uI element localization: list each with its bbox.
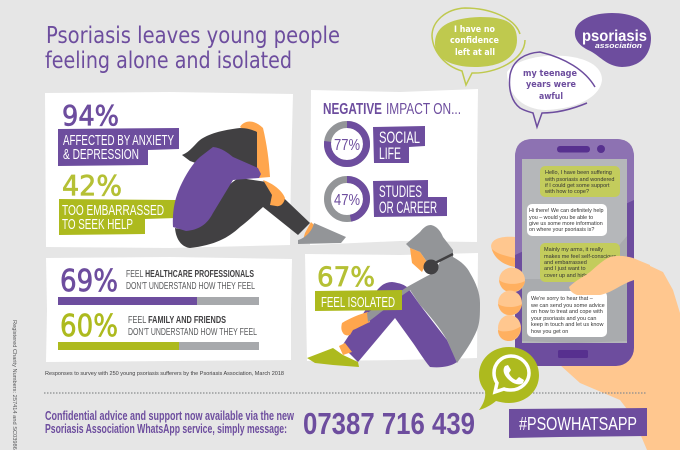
panel: feel isolated [305,253,478,361]
text: healthcare professionals: DON'T UNDERSTAND HOW THEY FEEL [126,281,255,292]
chat bubble 1: with psoriasis and wondered [544,177,614,183]
stat: 94%: 94% [62,99,119,132]
icon: whatsapp [479,347,539,410]
title: Psoriasis leaves young people [46,23,340,49]
bar: 60% [58,342,259,350]
label: affected by anxiety and depression: & DEPRESSION [63,146,139,163]
logo: psoriasis association [575,13,651,67]
footer message: Confidential advice and support now available via the new [45,408,295,423]
chat bubble 1: if I could get some support [545,183,610,189]
label: too embarrassed to seek help [59,199,176,235]
title [45,23,340,74]
donut: 47% studies or career [328,180,366,218]
divider [44,392,647,394]
phone number: 07387 716 439 [303,406,475,441]
speech bubble: teenage years: my teenage [523,69,577,79]
label: affected by anxiety and depression [58,128,179,166]
speech bubble: teenage years [507,52,602,127]
label: social life: SOCIAL [379,128,420,147]
chat bubble 3: makes me feel self-conscious [544,254,616,260]
hashtag [509,408,647,438]
chat bubble 4: We're sorry to hear that – [531,296,594,302]
phone body [515,139,634,366]
footer message: Psoriasis Association WhatsApp service, simply message: [45,421,287,436]
panel: healthcare and family understanding [46,257,292,362]
label: social life: LIFE [379,144,401,163]
logo: psoriasis association: psoriasis [582,28,647,45]
stat: 42%: 42% [62,169,122,202]
text: family and friends [128,315,257,338]
donut: 77% social life: 77% [334,137,360,154]
label: affected by anxiety and depression: AFFECTED BY ANXIETY [63,132,174,149]
label: studies or career: OR CAREER [379,198,437,217]
donut: 47% studies or career: 47% [334,192,360,209]
stat: 60%: 60% [60,309,118,344]
chat bubble 4: your psoriasis and you can [531,316,596,322]
bar: 69% [58,297,259,305]
chat bubble 2 [527,204,607,236]
label: feel isolated [315,290,402,311]
stat: 69%: 69% [60,264,118,299]
chat bubble 2: you – would you be able to [529,215,593,221]
label: social life [373,126,425,163]
heading [323,101,461,118]
chat bubble 4 [527,291,607,337]
speech bubble: no confidence: I have no [454,25,495,35]
heading: IMPACT ON... [386,101,461,118]
panel: anxiety and embarrassment [45,92,293,248]
chat bubble 3: cover up and hide [544,273,588,279]
speech bubble: no confidence: confidence [450,36,499,46]
hand: top finger [491,237,515,267]
text: family and friends: DON'T UNDERSTAND HOW THEY FEEL [128,327,257,338]
illustration: phone in hand [491,139,680,450]
charity registration: Registered Charity Numbers: 257414 and SC039866 [11,320,17,450]
heading: NEGATIVE [323,101,382,118]
logo: psoriasis association: association [595,41,642,50]
speech bubble: no confidence [432,8,525,85]
donut: 77% social life [328,124,366,164]
title: feeling alone and isolated [45,48,292,74]
chat bubble 1 [540,166,620,197]
hand: thumb over phone [569,256,650,300]
chat bubble 1: with how to cope? [544,189,589,195]
chat bubble 3: and embarrassed [544,260,587,266]
label: too embarrassed to seek help: TOO EMBARRASSED [62,202,164,219]
chat bubble 4: on how to treat and cope with [531,309,603,315]
text: healthcare professionals: FEEL HEALTHCARE PROFESSIONALS [126,269,254,280]
text: family and friends: FEEL FAMILY AND FRIENDS [128,315,226,326]
label: studies or career: STUDIES [379,182,422,201]
speech bubble: teenage years: awful [539,92,563,102]
chat bubble 4: keep in touch and let us know [531,322,603,328]
hashtag: #PSOWHATSAPP [519,414,637,434]
chat bubble 4: how you get on [531,329,568,335]
chat bubble 3: Mainly my arms, it really [544,247,603,253]
hand: palm behind phone [560,258,680,450]
chat bubble 3: and I just want to [544,266,586,272]
speech bubble: no confidence: left at all [455,48,495,58]
chat bubble 2: give us some more information [529,221,603,227]
chat bubble 3 [540,243,620,282]
survey note: Responses to survey with 250 young psoriasis sufferers by the Psoriasis Association, March 2018 [45,371,284,377]
chat bubble 4: we can send you some advice [530,303,605,309]
label: studies or career [373,180,447,217]
label: feel isolated: FEEL ISOLATED [321,294,395,311]
panel: negative impact [310,89,478,245]
text: healthcare professionals [126,269,255,292]
illustration: girl hugging knees [173,122,346,248]
chat bubble 2: on where your psoriasis is? [529,227,594,233]
speech bubble: teenage years: years were [526,80,576,90]
stat: 67%: 67% [317,262,375,293]
chat bubble 2: Hi there! We can definitely help [529,208,604,214]
chat bubble 1: Hello, I have been suffering [545,170,612,176]
illustration: hooded boy with headphones [307,225,480,367]
hand: fingertips [498,268,525,341]
footer message [45,408,295,436]
label: too embarrassed to seek help: TO SEEK HELP [62,216,133,233]
